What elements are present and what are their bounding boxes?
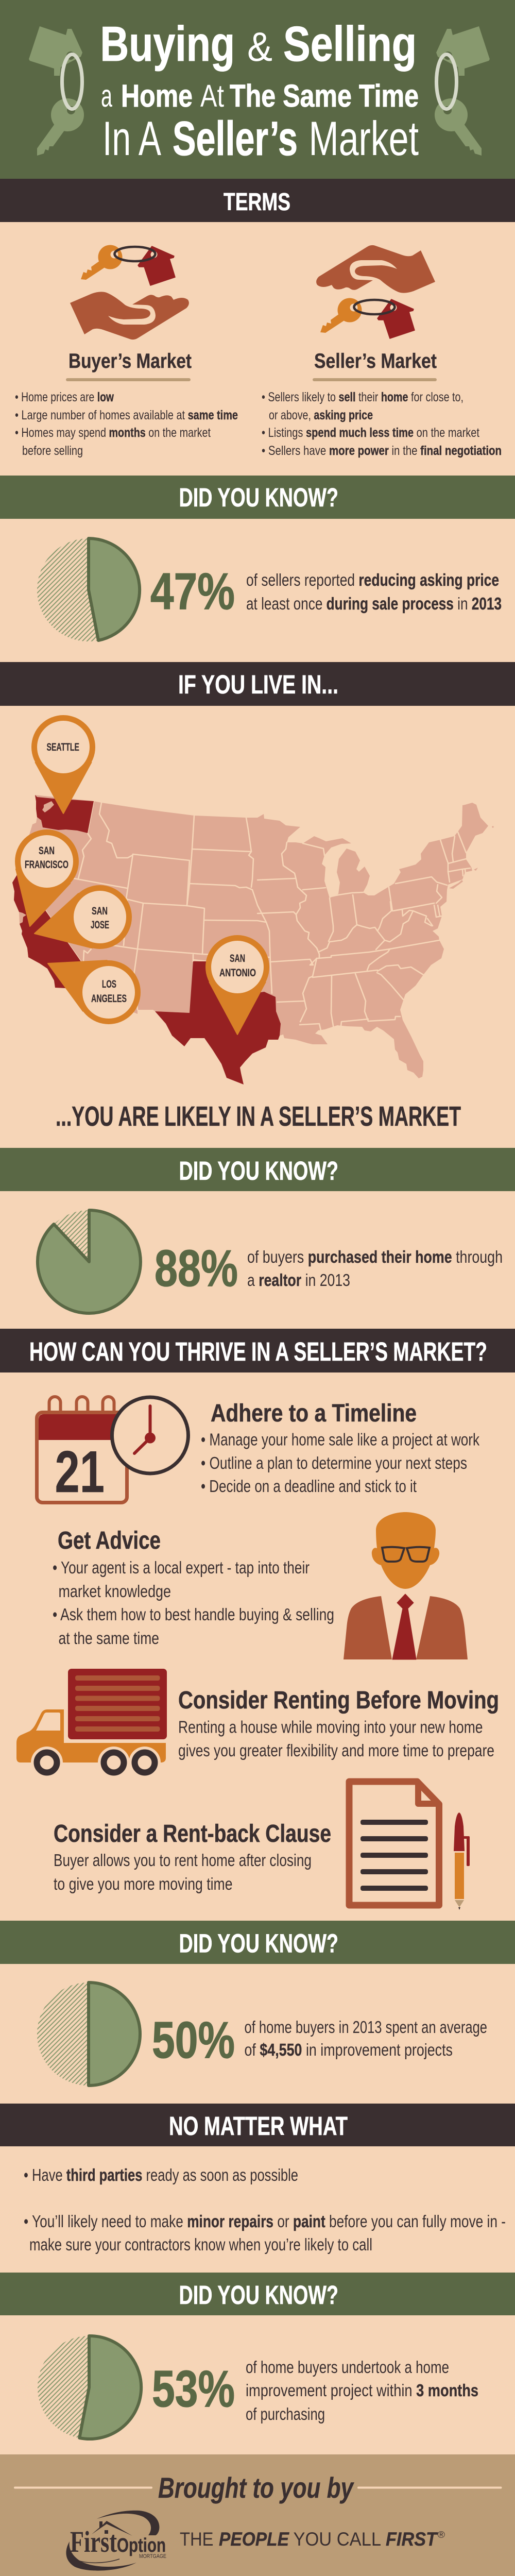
pin: San Jose: SAN bbox=[92, 905, 108, 917]
text: buyer's market bullets: • Homes may spend months on the market bbox=[15, 426, 211, 440]
map: United States with highlighted states bbox=[12, 795, 494, 1084]
logo: First Option Mortgage: MORTGAGE bbox=[139, 2553, 166, 2560]
tagline: the people you call first: YOU CALL bbox=[294, 2529, 381, 2550]
heading: consider a rent-back clause: Consider a Rent-back Clause bbox=[54, 1820, 331, 1848]
pie chart: 50% bbox=[37, 1982, 140, 2086]
banner: terms: TERMS bbox=[224, 189, 290, 216]
pin: San Jose: JOSE bbox=[91, 919, 109, 931]
text: 47% description: at least once during sale process in 2013 bbox=[246, 594, 502, 613]
pin: San Antonio: ANTONIO bbox=[219, 967, 256, 979]
text: timeline bullets bbox=[201, 1430, 479, 1496]
text: renting description bbox=[178, 1718, 494, 1760]
text: 88% description: of buyers purchased their home through bbox=[247, 1247, 503, 1266]
text: advice bullets: market knowledge bbox=[59, 1582, 171, 1601]
text: 50% description: of $4,550 in improvement projects bbox=[244, 2040, 453, 2059]
pin: Seattle bbox=[31, 715, 95, 814]
icon: calendar and clock bbox=[37, 1397, 188, 1505]
title: Buying bbox=[100, 16, 235, 72]
text: no matter what bullets: make sure your contractors know when you’re likely to call bbox=[29, 2235, 372, 2254]
tagline: the people you call first: THE bbox=[180, 2529, 213, 2550]
text: timeline bullets: • Decide on a deadline and stick to it bbox=[201, 1477, 417, 1496]
text: 88% description: a realtor in 2013 bbox=[247, 1270, 350, 1290]
title: At bbox=[200, 78, 224, 113]
banner: no matter what bbox=[0, 2104, 515, 2146]
banner: if you live in: IF YOU LIVE IN... bbox=[178, 670, 338, 699]
text: seller's market bullets bbox=[262, 390, 502, 458]
banner: did you know 4 bbox=[0, 2273, 515, 2315]
panel: consider renting before moving bbox=[16, 1669, 499, 1778]
icon: hand over key and house tag bbox=[316, 245, 435, 338]
header panel bbox=[0, 0, 515, 179]
banner: did you know 1 bbox=[0, 476, 515, 519]
title: Selling bbox=[283, 16, 417, 72]
panel: get advice bbox=[53, 1512, 468, 1659]
text: buyer's market bullets bbox=[15, 390, 238, 458]
pin: San Antonio bbox=[205, 935, 269, 1035]
pin: Los Angeles: LOS bbox=[102, 978, 116, 990]
title: In A bbox=[102, 111, 161, 165]
panel: consider a rent-back clause bbox=[54, 1782, 470, 1910]
text: advice bullets: at the same time bbox=[59, 1629, 159, 1648]
text: 53% description: improvement project within 3 months bbox=[246, 2381, 478, 2400]
panel: buyer's market bbox=[15, 245, 238, 458]
text: seller's market bullets: • Sellers have more power in the final negotiation bbox=[262, 444, 502, 458]
map: Washington highlighted bbox=[35, 795, 94, 833]
text: seller's market bullets: or above, asking price bbox=[269, 408, 373, 422]
text: seller's market bullets: • Listings spend much less time on the market bbox=[262, 426, 479, 440]
text: rent-back description bbox=[54, 1851, 312, 1893]
map: islands bbox=[449, 826, 494, 889]
heading: seller's market: Seller’s Market bbox=[314, 350, 437, 372]
text: advice bullets: • Ask them how to best handle buying & selling bbox=[53, 1605, 334, 1624]
number: 88%: 88% bbox=[154, 1240, 238, 1297]
tagline: the people you call first: FIRST bbox=[386, 2529, 438, 2550]
heading: get advice: Get Advice bbox=[58, 1527, 161, 1554]
title: Seller’s bbox=[173, 111, 298, 165]
text: 88% description bbox=[247, 1247, 503, 1290]
icon: left house key bbox=[29, 26, 84, 156]
banner: did you know 3 bbox=[0, 1921, 515, 1964]
pin: Los Angeles bbox=[48, 960, 141, 1024]
pie chart: 88% bbox=[38, 1210, 141, 1313]
text: 53% description bbox=[246, 2358, 478, 2424]
title: a bbox=[101, 78, 112, 113]
text: no matter what bullets bbox=[24, 2165, 506, 2254]
text: rent-back description: to give you more moving time bbox=[54, 1874, 233, 1893]
number: 50%: 50% bbox=[152, 2011, 235, 2069]
map: state borders bbox=[41, 801, 470, 1030]
banner: did you know 3: DID YOU KNOW? bbox=[179, 1929, 338, 1958]
banner: no matter what: NO MATTER WHAT bbox=[169, 2111, 348, 2141]
pin: Seattle: SEATTLE bbox=[46, 741, 79, 753]
banner: did you know 2: DID YOU KNOW? bbox=[179, 1156, 338, 1185]
number: 47%: 47% bbox=[150, 563, 235, 620]
title bbox=[100, 16, 419, 165]
heading: brought to you by: Brought to you by bbox=[158, 2471, 354, 2504]
heading: buyer's market: Buyer’s Market bbox=[68, 350, 192, 372]
pie chart: 47% bbox=[37, 538, 140, 641]
tagline: the people you call first: PEOPLE bbox=[219, 2529, 289, 2550]
text: advice bullets: • Your agent is a local expert - tap into their bbox=[53, 1558, 310, 1577]
pin: San Francisco: SAN bbox=[39, 845, 55, 857]
stat: 53 percent bbox=[38, 2336, 478, 2439]
stat: 47 percent bbox=[37, 538, 502, 641]
pin: Los Angeles: ANGELES bbox=[91, 993, 127, 1005]
logo: First Option Mortgage bbox=[66, 2511, 166, 2571]
banner: how can you thrive bbox=[0, 1329, 515, 1372]
text: buyer's market bullets: before selling bbox=[22, 444, 83, 458]
banner: did you know 2 bbox=[0, 1148, 515, 1191]
title: Market bbox=[309, 111, 419, 165]
map: California highlighted bbox=[12, 875, 85, 988]
tagline: the people you call first: ® bbox=[438, 2530, 445, 2540]
banner: did you know 1: DID YOU KNOW? bbox=[179, 483, 338, 512]
tagline: the people you call first bbox=[180, 2529, 445, 2550]
logo: First Option Mortgage: First bbox=[70, 2525, 117, 2558]
icon: document bbox=[349, 1782, 439, 1905]
pie chart: 53% bbox=[38, 2336, 141, 2439]
stat: 88 percent bbox=[38, 1210, 503, 1313]
icon: pen bbox=[454, 1812, 470, 1910]
logo: First Option Mortgage: Option bbox=[117, 2535, 166, 2556]
text: 53% description: of home buyers undertook a home bbox=[246, 2358, 449, 2377]
text: no matter what bullets: • Have third parties ready as soon as possible bbox=[24, 2165, 298, 2184]
icon: right house key bbox=[435, 26, 490, 156]
icon: agent in suit with glasses bbox=[344, 1512, 468, 1659]
text: 50% description bbox=[244, 2018, 487, 2059]
text: rent-back description: Buyer allows you to rent home after closing bbox=[54, 1851, 312, 1870]
icon: calendar and clock: 21 bbox=[55, 1439, 105, 1505]
number: 53%: 53% bbox=[152, 2360, 235, 2418]
pin: San Francisco: FRANCISCO bbox=[25, 859, 68, 871]
map: Texas highlighted bbox=[155, 961, 281, 1084]
footer panel bbox=[0, 2454, 515, 2576]
icon: moving truck bbox=[16, 1669, 167, 1778]
title: & bbox=[247, 24, 272, 70]
banner: if you live in bbox=[0, 662, 515, 706]
text: buyer's market bullets: • Large number of homes available at same time bbox=[15, 408, 238, 422]
panel: adhere to a timeline bbox=[37, 1397, 479, 1505]
text: 47% description bbox=[246, 570, 502, 613]
map: land silhouette bbox=[12, 795, 488, 1078]
pin: San Antonio: SAN bbox=[230, 953, 245, 964]
text: 53% description: of purchasing bbox=[246, 2404, 325, 2424]
banner: did you know 4: DID YOU KNOW? bbox=[179, 2280, 338, 2310]
icon: key and house tag over open hand bbox=[70, 245, 189, 340]
banner: terms bbox=[0, 179, 515, 222]
title: Home bbox=[121, 78, 193, 113]
pin: San Jose bbox=[35, 885, 132, 949]
stat: 50 percent bbox=[37, 1982, 487, 2086]
text: seller's market bullets: • Sellers likely to sell their home for close to, bbox=[262, 390, 464, 404]
pin: San Francisco bbox=[15, 829, 79, 926]
heading: adhere to a timeline: Adhere to a Timeline bbox=[211, 1400, 417, 1427]
text: buyer's market bullets: • Home prices are low bbox=[15, 390, 114, 404]
text: advice bullets bbox=[53, 1558, 334, 1648]
panel: seller's market bbox=[262, 245, 502, 458]
title: The Same Time bbox=[230, 78, 419, 113]
